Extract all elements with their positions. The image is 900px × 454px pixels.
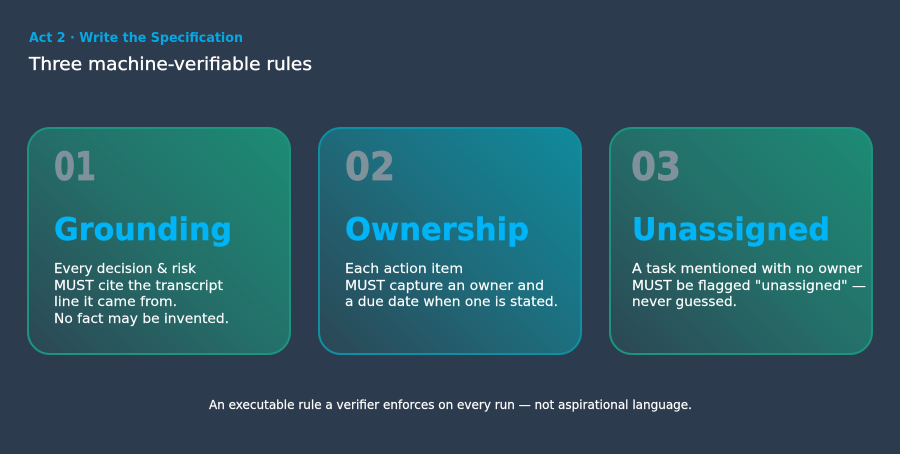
number 02: 02	[345, 145, 395, 190]
footer note: An executable rule a verifier enforces on every run — not aspirational language.	[209, 398, 692, 412]
body text: grounding	[54, 261, 229, 327]
body text: unassigned: MUST be flagged "unassigned" —	[632, 278, 866, 294]
slide heading: Three machine-verifiable rules	[28, 54, 312, 75]
number 03: 03	[631, 145, 681, 190]
title: grounding: Grounding	[54, 212, 232, 248]
body text: ownership: a due date when one is stated.	[345, 294, 558, 310]
panel: ownership	[319, 128, 581, 354]
body text: grounding: Every decision & risk	[54, 261, 196, 277]
panel: grounding	[28, 128, 290, 354]
eyebrow: act label: Act 2 · Write the Specification	[29, 30, 243, 46]
body text: grounding: line it came from.	[54, 294, 177, 310]
title: ownership: Ownership	[345, 212, 529, 248]
body text: unassigned	[632, 261, 866, 310]
body text: ownership: Each action item	[345, 261, 463, 277]
body text: ownership: MUST capture an owner and	[345, 278, 544, 294]
body text: grounding: MUST cite the transcript	[54, 278, 223, 294]
panel: unassigned	[610, 128, 872, 354]
body text: ownership	[345, 261, 558, 310]
title: unassigned: Unassigned	[632, 212, 830, 248]
number 01: 01	[54, 145, 96, 190]
body text: grounding: No fact may be invented.	[54, 311, 229, 327]
body text: unassigned: never guessed.	[632, 294, 737, 310]
body text: unassigned: A task mentioned with no owner	[632, 261, 862, 277]
